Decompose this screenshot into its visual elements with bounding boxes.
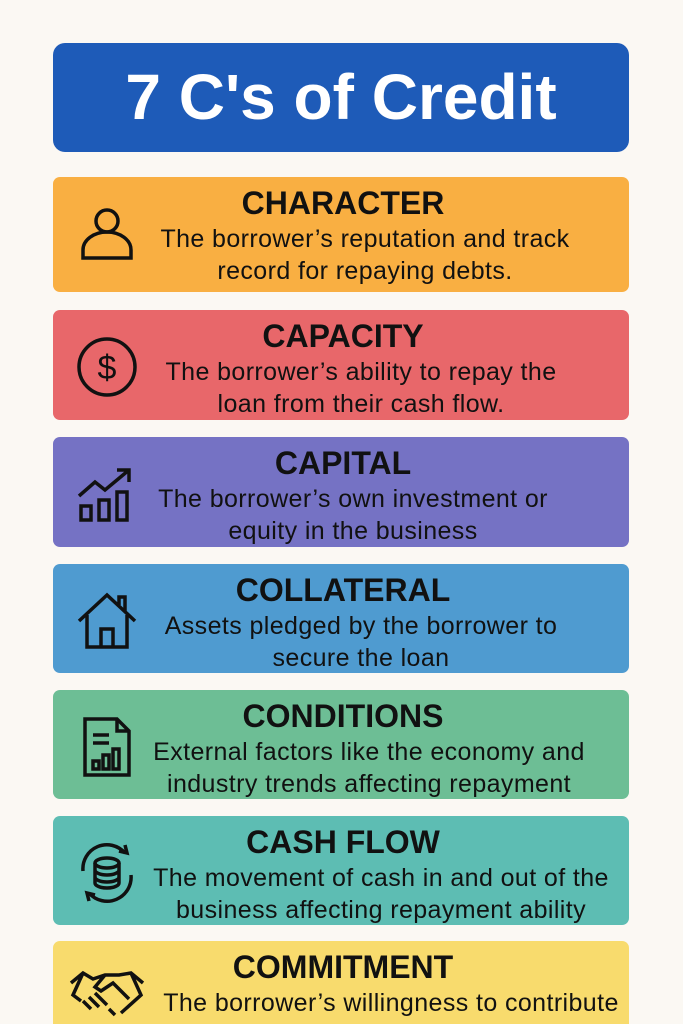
text: The borrower’s willingness to contribute [163,989,619,1017]
heading: COMMITMENT [233,949,453,985]
text [165,358,557,418]
heading: COLLATERAL [236,572,450,608]
heading: CHARACTER [242,185,444,221]
icon: coins cycle [81,843,133,903]
text: secure the loan [273,644,449,672]
panel: capital [53,437,629,547]
title: 7 C's of Credit [125,61,557,133]
text: equity in the business [228,517,478,545]
text: External factors like the economy and [153,738,585,766]
panel: character [53,177,629,292]
heading: CASH FLOW [246,824,440,860]
text: The borrower’s own investment or [158,485,548,513]
panel: conditions [53,690,629,799]
icon: handshake [70,970,144,1016]
icon: dollar: $ [98,349,117,387]
title [53,43,629,152]
text [153,738,585,798]
text [153,864,609,924]
text: The borrower’s ability to repay the [165,358,557,386]
text: loan from their cash flow. [218,390,504,418]
heading: CAPACITY [262,318,424,354]
text: business affecting repayment ability [176,896,586,924]
icon: person [81,208,133,260]
panel: commitment [53,941,629,1024]
text: The movement of cash in and out of the [153,864,609,892]
text: industry trends affecting repayment [167,770,571,798]
text [164,612,557,672]
heading: CONDITIONS [243,698,443,734]
text: Assets pledged by the borrower to [165,612,557,640]
text: record for repaying debts. [217,257,513,285]
panel: collateral [53,564,629,673]
icon: report [83,717,131,777]
panel: capacity [53,310,629,420]
panel: cash flow [53,816,629,925]
text [158,485,548,545]
icon: house [78,592,136,649]
text: The borrower’s reputation and track [160,225,570,253]
heading: CAPITAL [275,445,411,481]
icon: dollar [77,337,137,397]
text [160,225,570,285]
icon: growth chart [78,468,131,522]
